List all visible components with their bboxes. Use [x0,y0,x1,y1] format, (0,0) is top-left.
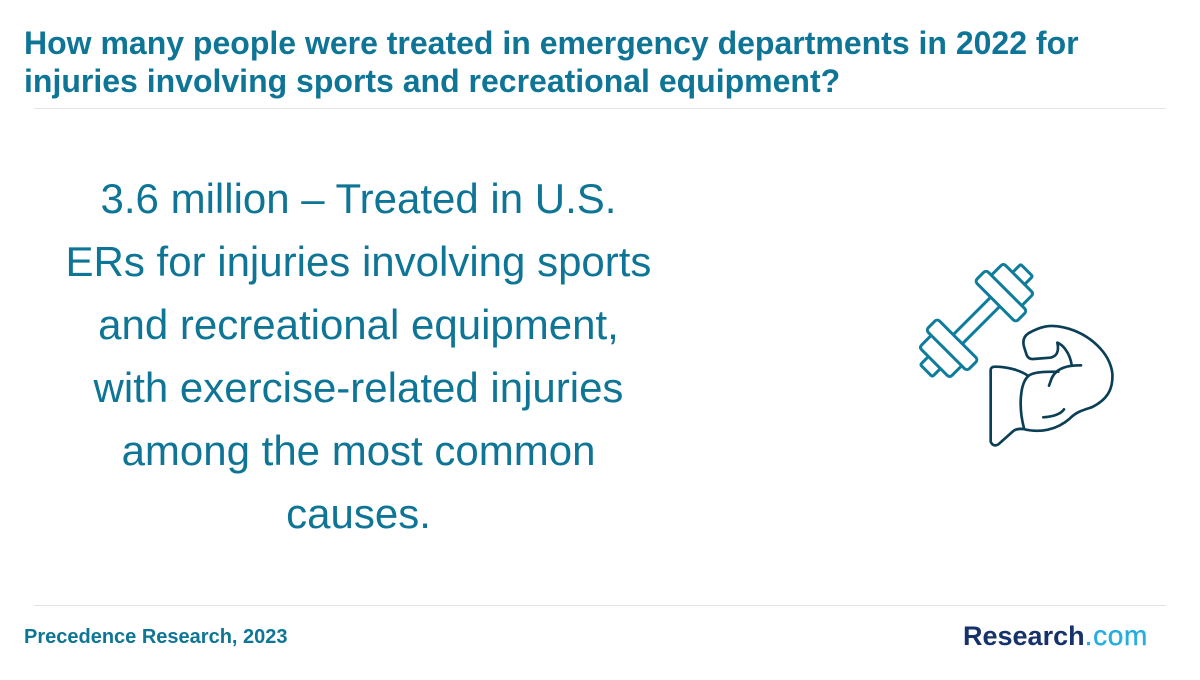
icon: flexed arm [991,326,1112,445]
main statement text: among the most common [122,427,595,474]
main statement text: ERs for injuries involving sports [66,238,651,285]
title: injuries involving sports and recreational equipment? [24,63,840,99]
title [24,25,1079,99]
icon: dumbbell and flexed arm [918,262,1114,447]
logo: Research.com: Research.com [963,620,1148,651]
main statement text: causes. [286,490,431,537]
source citation: Precedence Research, 2023 [24,626,288,648]
main statement text [66,175,651,537]
title: How many people were treated in emergency departments in 2022 for [24,25,1079,61]
icon: dumbbell [906,250,1047,391]
main statement text: and recreational equipment, [98,301,619,348]
main statement text: 3.6 million – Treated in U.S. [101,175,616,222]
main statement text: with exercise-related injuries [94,364,623,411]
